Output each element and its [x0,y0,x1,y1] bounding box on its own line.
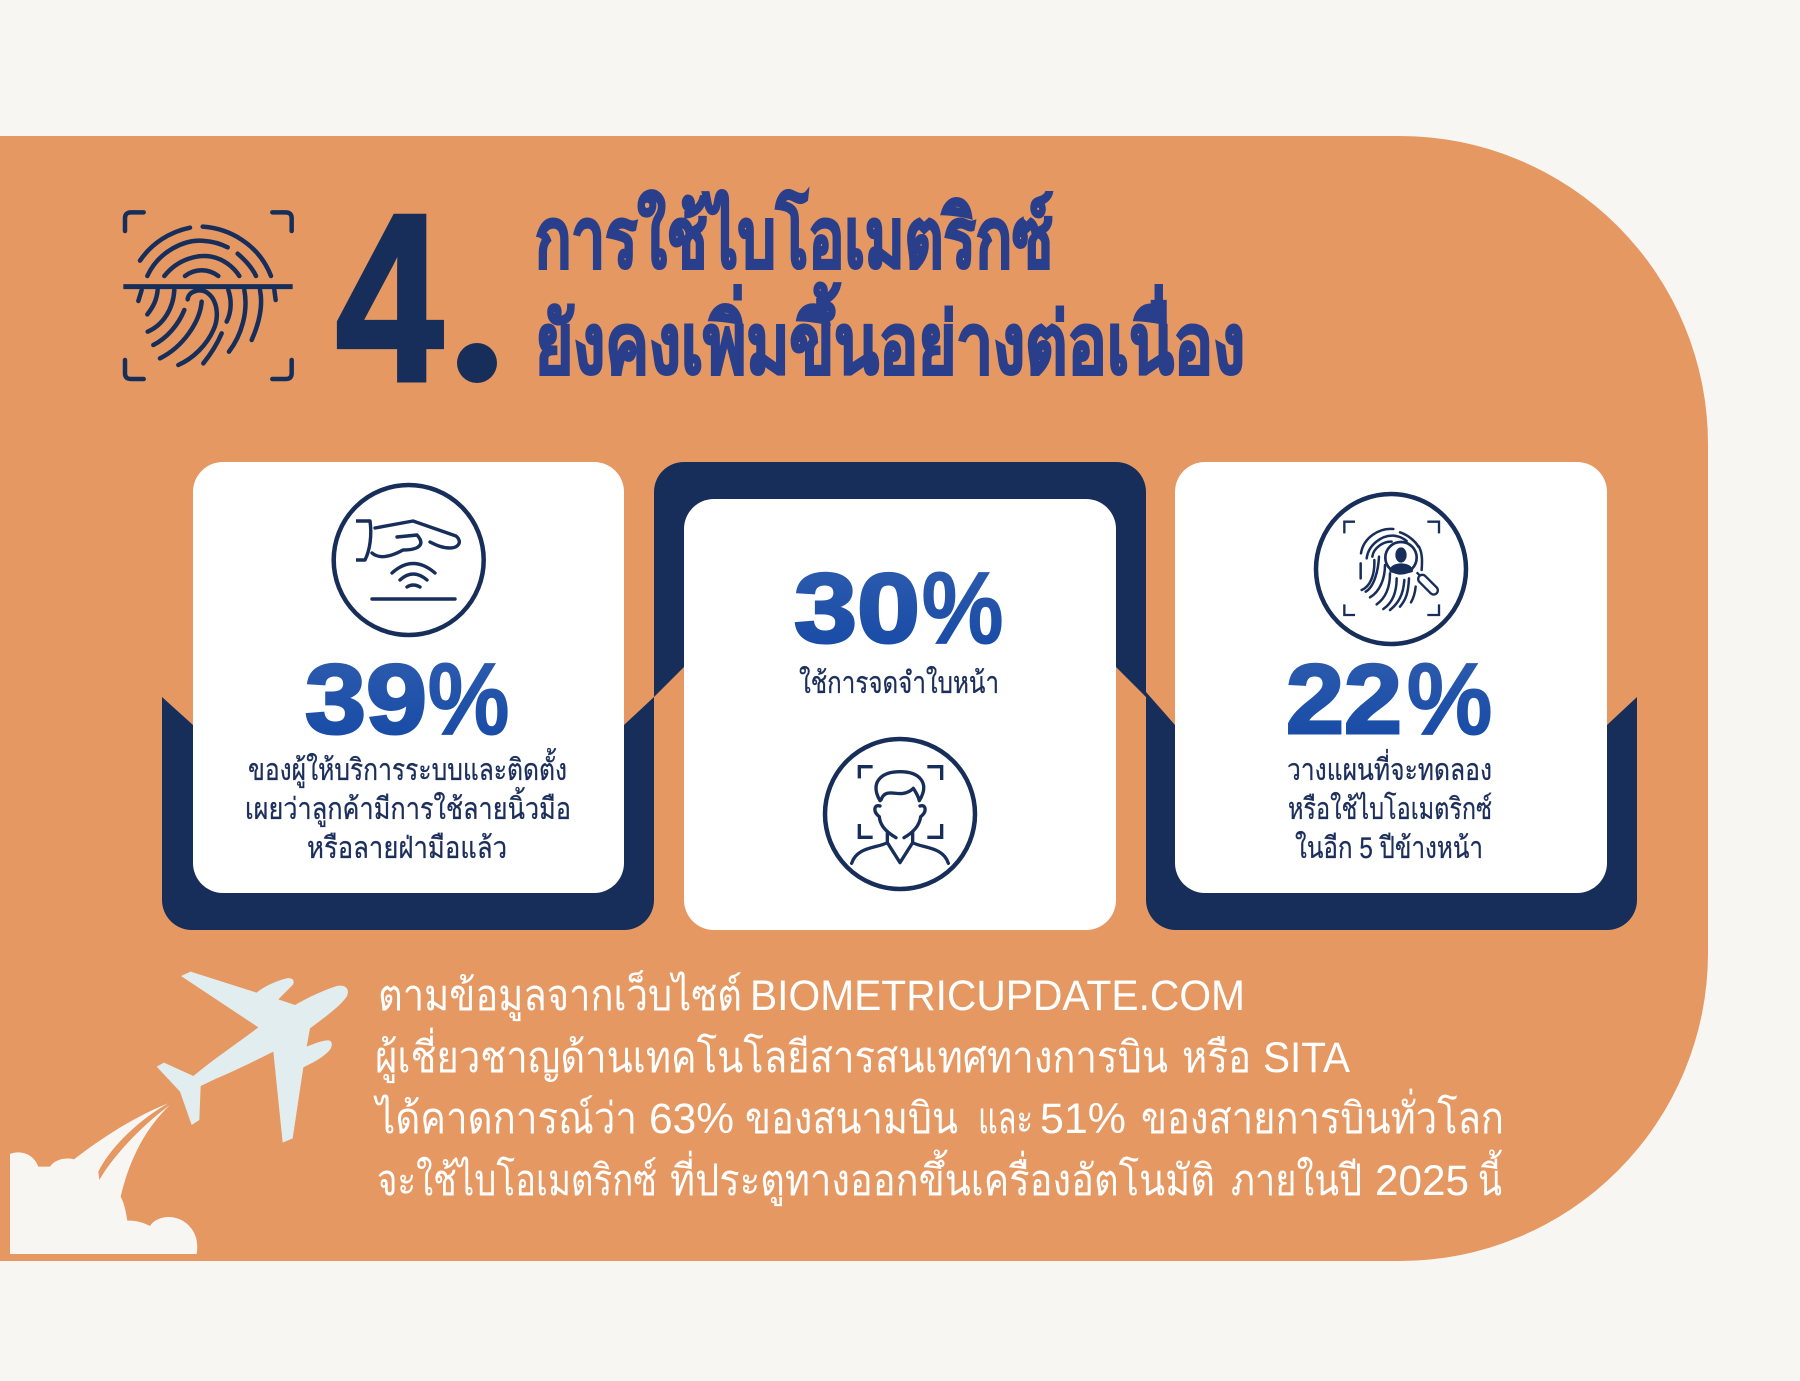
panel: card frames [162,462,1637,930]
body text: ภายในปี [1231,1156,1362,1205]
icon: hand over sensor [334,485,484,635]
icon: smoke cloud [10,1103,197,1254]
body text: หรือ [1182,1034,1251,1082]
body text: BIOMETRICUPDATE.COM [750,972,1245,1020]
body text: 51% [1040,1095,1126,1143]
body text: นี้ [1478,1149,1502,1205]
body text: ของสายการบินทั่วโลก [1141,1089,1504,1143]
body text: และ [978,1095,1033,1143]
icon: airplane [157,972,348,1143]
description: เผยว่าลูกค้ามีการใช้ลายนิ้วมือ [245,787,571,827]
title: ยังคงเพิ่มขึ้นอย่างต่อเนื่อง [535,282,1245,391]
stat: 22%: 22 [1286,644,1402,754]
panel: card 39% [193,462,624,893]
stat: 22% [1286,644,1492,754]
panel: card 30% [684,499,1116,930]
body text: ผู้เชี่ยวชาญด้านเทคโนโลยีสารสนเทศทางการบิน [375,1028,1168,1084]
body text: ได้คาดการณ์ว่า [373,1094,637,1143]
panel: card 22% [1175,462,1607,893]
body text [373,970,1504,1207]
background panel [0,136,1708,1261]
body text: 2025 [1375,1157,1469,1205]
description: ใช้การจดจำใบหน้า [799,666,999,700]
stat: 39%: % [428,644,509,754]
section number: 4 [336,166,443,431]
stat: 30%: % [922,553,1003,663]
stat: 39% [305,644,509,754]
body text: 63% [649,1095,734,1143]
body text: ตามข้อมูลจากเว็บไซต์ [378,970,742,1022]
stat: 22%: % [1407,644,1492,754]
icon: fingerprint with magnifier [1316,494,1466,644]
description [245,748,571,865]
stat: 39%: 39 [305,644,427,754]
title: การใช้ไบโอเมตริกซ์ [535,190,1053,285]
stat: 30% [794,553,1003,663]
body text: จะใช้ไบโอเมตริกซ์ [377,1156,657,1205]
stat: 30%: 30 [794,553,920,663]
description: วางแผนที่จะทดลอง [1287,749,1492,787]
body text: SITA [1263,1034,1350,1082]
icon: face recognition [825,739,975,889]
body text: ที่ประตูทางออกขึ้นเครื่องอัตโนมัติ [670,1149,1215,1207]
description: ในอีก 5 ปีข้างหน้า [1295,831,1483,865]
description: หรือใช้ไบโอเมตริกซ์ [1288,791,1492,826]
description: หรือลายฝ่ามือแล้ว [307,832,507,865]
title [535,190,1245,391]
description [1287,749,1492,865]
description: ของผู้ให้บริการระบบและติดตั้ง [248,748,567,788]
icon: fingerprint scan [123,212,293,379]
body text: ของสนามบิน [745,1095,958,1143]
